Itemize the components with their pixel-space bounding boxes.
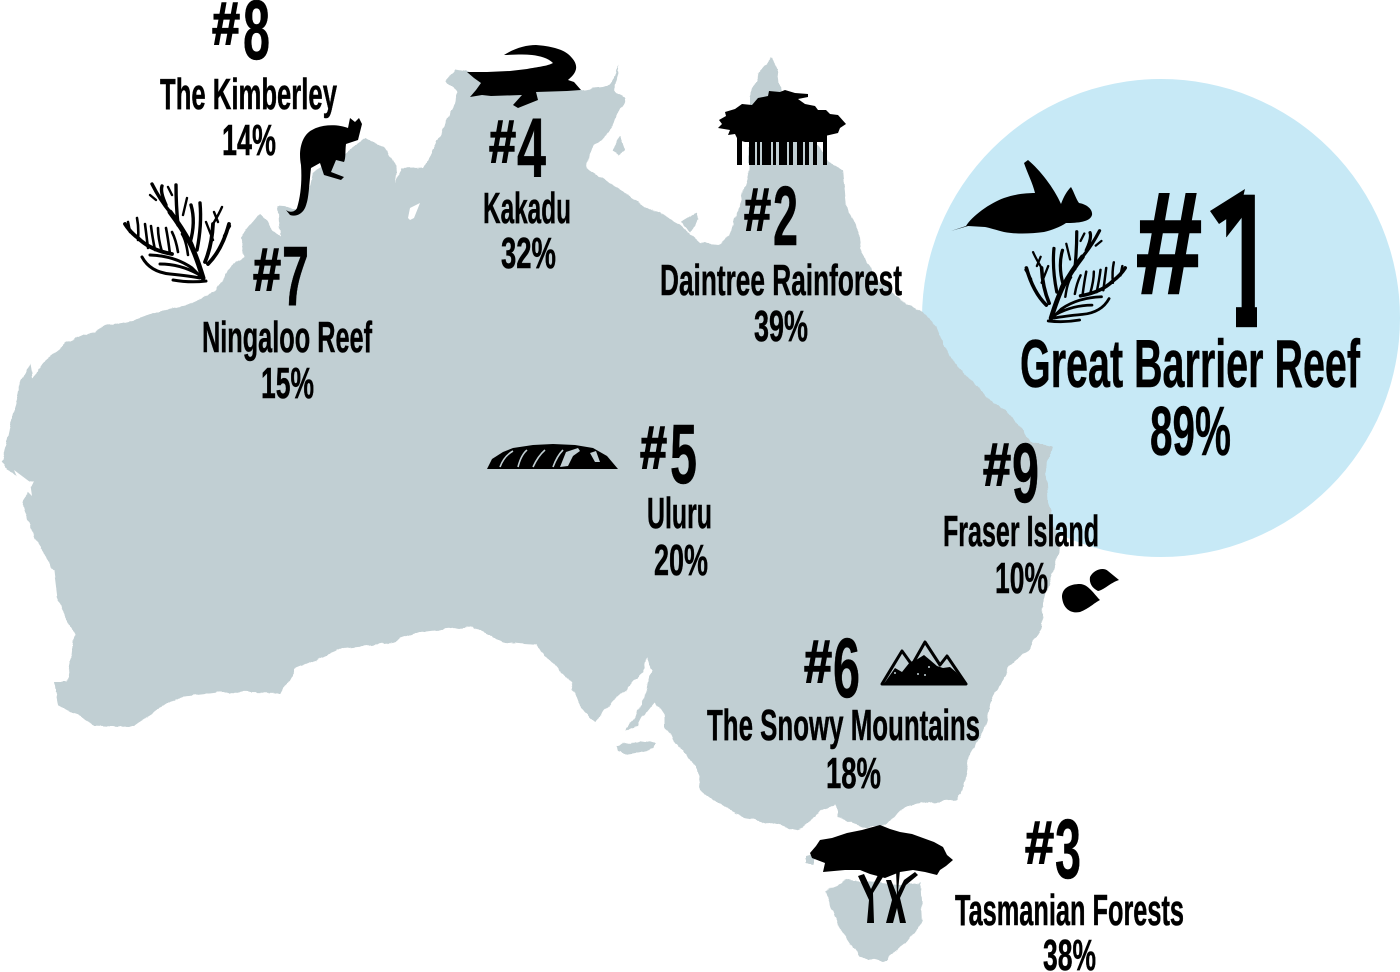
- label #1: Great Barrier Reef: [1020, 153, 1360, 470]
- label #9: Fraser Island: Fraser Island: [943, 507, 1099, 556]
- label #9: Fraser Island: 9: [1012, 426, 1039, 520]
- label #2: Daintree Rainforest: [660, 169, 902, 351]
- label #8: The Kimberley: [160, 0, 337, 165]
- map details: inland notches: [14, 203, 838, 816]
- icon: coral, Great Barrier Reef: [1025, 231, 1125, 322]
- icon: fish pair: [1062, 569, 1119, 612]
- highlight circle: Great Barrier Reef: [922, 79, 1400, 557]
- label #7: Ningaloo Reef: [202, 229, 372, 408]
- label #1: Great Barrier Reef: 1: [1220, 153, 1272, 368]
- label #9: Fraser Island: 10%: [995, 554, 1048, 603]
- label #4: Kakadu: [483, 101, 571, 278]
- label #8: The Kimberley: The Kimberley: [160, 70, 337, 119]
- icon: sea turtle: [951, 160, 1092, 234]
- icon: snowy mountains: [882, 642, 966, 685]
- label #3: Tasmanian Forests: #: [1025, 809, 1054, 876]
- label #9: Fraser Island: [943, 426, 1099, 603]
- label #9: Fraser Island: #: [983, 431, 1011, 498]
- label #6: The Snowy Mountains: The Snowy Mountains: [707, 701, 980, 750]
- icon: kangaroo: [286, 118, 362, 216]
- label #3: Tasmanian Forests: 3: [1055, 802, 1081, 896]
- icon: crocodile: [467, 45, 581, 108]
- label #5: Uluru: 5: [670, 407, 697, 501]
- icon: acacia trees: [810, 825, 953, 923]
- label #4: Kakadu: 32%: [501, 229, 556, 278]
- map of Australia: [2, 57, 1060, 962]
- label #6: The Snowy Mountains: 6: [833, 621, 860, 715]
- label #6: The Snowy Mountains: #: [804, 628, 832, 695]
- label #7: Ningaloo Reef: 7: [282, 229, 309, 323]
- label #6: The Snowy Mountains: [707, 621, 980, 798]
- label #2: Daintree Rainforest: #: [744, 176, 771, 243]
- icon: Uluru rock: [487, 444, 618, 469]
- label #2: Daintree Rainforest: 2: [773, 169, 798, 263]
- label #4: Kakadu: #: [489, 108, 516, 175]
- label #7: Ningaloo Reef: 15%: [261, 359, 314, 408]
- label #7: Ningaloo Reef: #: [253, 236, 281, 303]
- label #2: Daintree Rainforest: Daintree Rainforest: [660, 256, 902, 305]
- label #2: Daintree Rainforest: 39%: [754, 302, 808, 351]
- label #5: Uluru: Uluru: [647, 489, 712, 538]
- label #4: Kakadu: Kakadu: [483, 184, 571, 233]
- label #3: Tasmanian Forests: Tasmanian Forests: [955, 886, 1184, 935]
- label #3: Tasmanian Forests: [955, 802, 1184, 972]
- label #7: Ningaloo Reef: Ningaloo Reef: [202, 313, 372, 362]
- label #5: Uluru: [640, 407, 712, 585]
- icon: rainforest tree: [718, 90, 846, 165]
- label #5: Uluru: #: [640, 414, 667, 481]
- label #8: The Kimberley: 14%: [222, 116, 276, 165]
- icon: coral, Ningaloo: [125, 184, 230, 282]
- label #4: Kakadu: 4: [517, 101, 546, 195]
- label #6: The Snowy Mountains: 18%: [826, 749, 881, 798]
- label #1: Great Barrier Reef: 89%: [1150, 392, 1231, 470]
- label #1: Great Barrier Reef: #: [1136, 162, 1202, 324]
- label #5: Uluru: 20%: [654, 536, 708, 585]
